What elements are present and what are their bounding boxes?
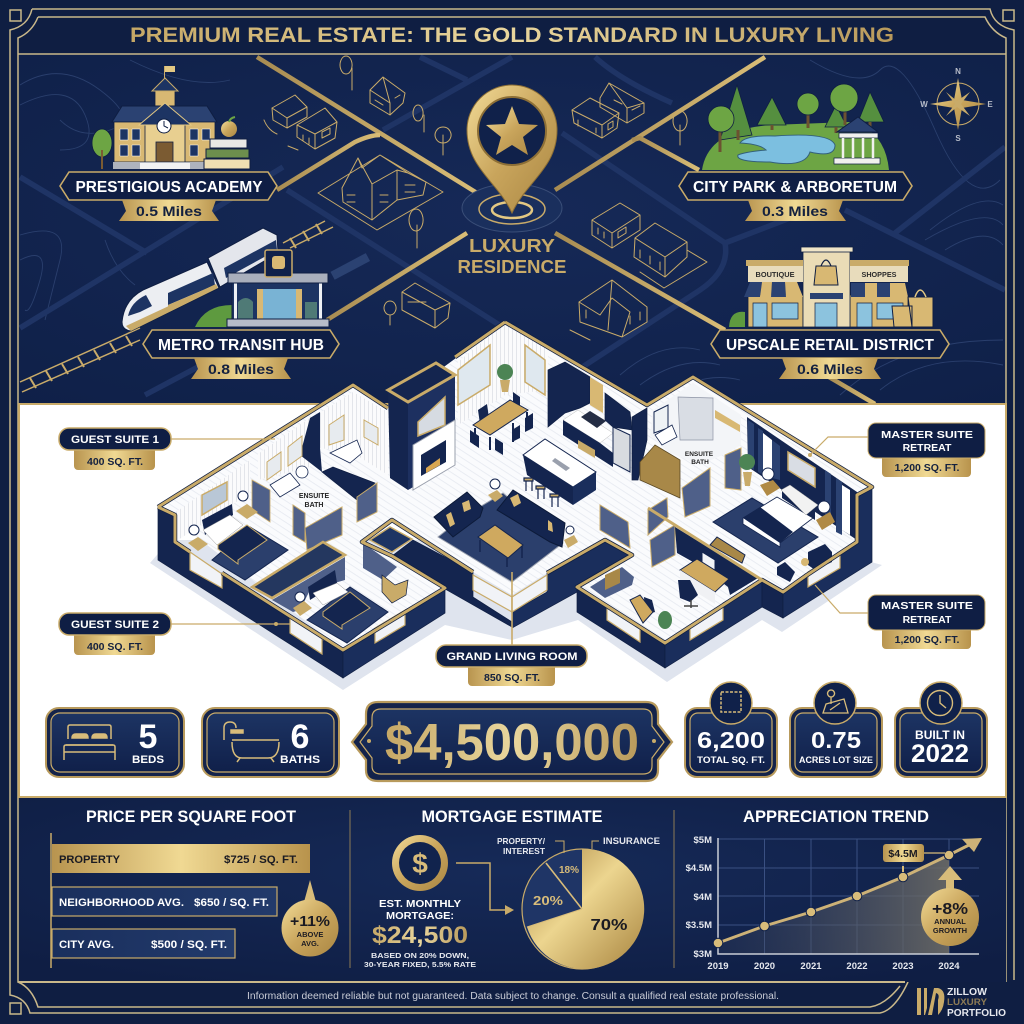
callout: guest suite 2 — [59, 613, 290, 655]
gold wall tops — [158, 322, 872, 650]
callout: master suite retreat upper: 1,200 SQ. FT. — [895, 462, 959, 474]
stat card: baths: BATHS — [280, 754, 320, 766]
label: prestigious academy: PRESTIGIOUS ACADEMY — [76, 179, 263, 196]
callout: master suite retreat upper: RETREAT — [903, 442, 952, 454]
callout: 4.5M — [883, 844, 945, 872]
stat card: baths — [202, 708, 339, 777]
arrow to pie — [456, 863, 514, 915]
grid — [718, 839, 979, 954]
pie chart: 20% — [533, 893, 563, 908]
chart: mortgage estimate: 30-YEAR FIXED, 5.5% RATE — [364, 960, 476, 969]
living room furniture — [434, 479, 578, 582]
fireplace wall — [388, 363, 455, 490]
bar: city average: $500 / SQ. FT. — [151, 939, 227, 951]
icon: compass rose: E — [987, 100, 993, 109]
icon: dollar coin — [392, 835, 448, 891]
chart: mortgage estimate — [364, 807, 660, 969]
chart: mortgage estimate: EST. MONTHLY — [379, 898, 461, 910]
pie chart: 18% — [559, 865, 579, 876]
icon: compass rose: N — [955, 67, 961, 76]
stat card: baths: 6 — [291, 718, 309, 756]
title: PREMIUM REAL ESTATE: THE GOLD STANDARD IN LUXURY LIVING — [130, 24, 894, 47]
icon: train — [122, 228, 278, 331]
callout: master suite retreat lower: RETREAT — [903, 614, 952, 626]
callout: guest suite 1 — [59, 428, 275, 470]
axis labels: $3.5M — [686, 920, 712, 931]
master suite — [713, 417, 857, 582]
chart: mortgage estimate: MORTGAGE: — [386, 910, 454, 922]
line-art neighbourhood houses — [264, 56, 707, 340]
stat card: lot size: 0.75 — [811, 727, 861, 753]
pie chart — [522, 849, 644, 969]
kitchen island — [523, 439, 596, 507]
stat card: year built: 2022 — [911, 740, 969, 768]
master ensuite: BATH — [691, 459, 709, 466]
callout: master suite retreat upper: MASTER SUITE — [881, 429, 973, 441]
pin: luxury residence — [462, 85, 562, 232]
kitchen — [548, 362, 647, 480]
guest suite 1 — [176, 392, 388, 580]
label: upscale retail: UPSCALE RETAIL DISTRICT — [726, 337, 934, 354]
pie labels: INSURANCE — [603, 836, 660, 846]
callout: guest suite 2: 400 SQ. FT. — [87, 641, 143, 653]
stat card: year built: BUILT IN — [915, 728, 965, 742]
pie labels: PROPERTY/ — [497, 836, 546, 846]
pie chart: 70% — [590, 917, 628, 934]
windows in exterior walls — [190, 552, 840, 654]
stat card: total sq ft: 6,200 — [697, 727, 765, 753]
icon: train tracks — [20, 221, 333, 392]
chart: mortgage estimate: MORTGAGE ESTIMATE — [422, 807, 602, 826]
logo: ZILLOW — [947, 987, 988, 998]
bar: property: PROPERTY — [59, 854, 121, 866]
pie labels: INTEREST — [503, 846, 546, 856]
logo — [917, 987, 1006, 1019]
pin label: RESIDENCE — [458, 257, 566, 277]
label: city park: CITY PARK & ARBORETUM — [693, 179, 897, 196]
floor plan — [150, 322, 882, 690]
axis labels: $3M — [694, 949, 712, 960]
guest suite 2 — [252, 527, 412, 643]
price plaque: $4,500,000 — [385, 714, 639, 772]
chart: appreciation trend — [686, 807, 982, 972]
callout: 4.5M: $4.5M — [888, 848, 918, 860]
stat card: year built — [895, 682, 987, 777]
stat card: total sq ft: TOTAL SQ. FT. — [697, 755, 765, 766]
icon: dollar coin: $ — [412, 848, 428, 879]
guest suite 1: ENSUITE — [299, 493, 329, 500]
bar: city average — [52, 929, 235, 958]
callout: annual growth: GROWTH — [933, 926, 967, 935]
price plaque — [352, 702, 672, 781]
panel: neighborhood map — [19, 54, 1006, 404]
pie labels — [497, 836, 660, 856]
icon: retail storefront — [729, 247, 933, 327]
icon: retail storefront: BOUTIQUE — [756, 272, 795, 279]
bar: neighborhood average: $650 / SQ. FT. — [194, 897, 269, 909]
icon: compass rose — [920, 67, 993, 143]
icon: academy building — [92, 66, 250, 169]
logo: PORTFOLIO — [947, 1008, 1006, 1019]
floor surface — [158, 322, 872, 650]
callout: annual growth — [921, 866, 979, 946]
panel: bottom analytics — [18, 797, 1006, 982]
callout: guest suite 2: GUEST SUITE 2 — [71, 619, 159, 631]
exterior walls — [158, 487, 872, 678]
guest suite 1: BATH — [305, 502, 323, 509]
stat card: lot size: ACRES LOT SIZE — [799, 755, 873, 766]
callout: annual growth: +8% — [932, 901, 968, 918]
icon: compass rose: S — [955, 134, 961, 143]
bar: property: $725 / SQ. FT. — [224, 854, 298, 866]
icon: transit station — [195, 250, 329, 327]
label: city park: 0.3 Miles — [762, 203, 828, 219]
icon: gold map pin — [467, 85, 557, 213]
chart: appreciation trend: 2019 — [707, 961, 729, 972]
stat card: beds: 5 — [139, 718, 157, 756]
logo: LUXURY — [947, 997, 988, 1008]
callout: above average: AVG. — [301, 939, 319, 948]
stat card: total sq ft — [685, 682, 777, 777]
trend line — [713, 838, 982, 948]
pin label: LUXURY — [469, 236, 555, 256]
master ensuite: ENSUITE — [685, 451, 714, 458]
label: metro transit hub: 0.8 Miles — [208, 361, 274, 377]
callout: grand living room — [436, 572, 587, 686]
bar: neighborhood average: NEIGHBORHOOD AVG. — [59, 897, 184, 909]
label: metro transit hub: METRO TRANSIT HUB — [158, 337, 324, 354]
callout: grand living room: GRAND LIVING ROOM — [446, 651, 578, 663]
chart: mortgage estimate: BASED ON 20% DOWN, — [371, 951, 469, 960]
callout: above average — [282, 880, 338, 956]
stat card: lot size — [790, 682, 882, 777]
label: city park — [679, 172, 912, 221]
chart: appreciation trend: 2022 — [846, 961, 868, 972]
label: prestigious academy — [60, 172, 277, 221]
axis labels: $4M — [694, 892, 712, 903]
callout: master suite retreat lower — [815, 585, 985, 649]
chart: price per square foot — [51, 807, 338, 968]
callout: annual growth: ANNUAL — [934, 917, 966, 926]
bar: neighborhood average — [52, 887, 277, 916]
callout: guest suite 1: GUEST SUITE 1 — [71, 434, 159, 446]
pin label — [458, 236, 566, 277]
chart: appreciation trend: APPRECIATION TREND — [743, 807, 929, 826]
chart: mortgage estimate: $24,500 — [372, 922, 468, 949]
icon: retail storefront: SHOPPES — [862, 272, 897, 279]
label: upscale retail — [711, 330, 949, 379]
panel: white floor plan background — [19, 404, 1006, 797]
footer disclaimer: Information deemed reliable but not guaranteed. Data subject to change. Consult a qualified real estate professional. — [247, 991, 779, 1002]
callout: grand living room: 850 SQ. FT. — [484, 672, 540, 684]
chart: appreciation trend: 2023 — [892, 961, 914, 972]
office — [590, 498, 758, 629]
callout: master suite retreat upper — [808, 423, 985, 477]
icon: bed — [64, 725, 115, 760]
chart: appreciation trend: 2024 — [938, 961, 960, 972]
label: prestigious academy: 0.5 Miles — [136, 203, 202, 219]
axis labels: $4.5M — [686, 863, 712, 874]
bar: property — [52, 844, 310, 873]
chart: price per square foot: PRICE PER SQUARE FOOT — [86, 807, 297, 826]
callout: above average: ABOVE — [297, 930, 323, 939]
label: upscale retail: 0.6 Miles — [797, 361, 863, 377]
chart: appreciation trend: 2021 — [800, 961, 822, 972]
callout: above average: +11% — [290, 913, 330, 930]
callout: guest suite 1: 400 SQ. FT. — [87, 456, 143, 468]
stat card: beds — [46, 708, 184, 777]
icon: city park — [702, 84, 889, 170]
bar: city average: CITY AVG. — [59, 939, 114, 951]
axis labels: $5M — [694, 835, 712, 846]
label: metro transit hub — [143, 330, 339, 379]
icon: bathtub — [224, 722, 279, 762]
axis labels — [686, 835, 712, 960]
callout: master suite retreat lower: MASTER SUITE — [881, 600, 973, 612]
master ensuite — [640, 383, 741, 517]
callout: master suite retreat lower: 1,200 SQ. FT. — [895, 634, 959, 646]
living and dining back wall — [458, 323, 548, 455]
stat card: beds: BEDS — [132, 754, 164, 766]
chart: appreciation trend: 2020 — [754, 961, 775, 972]
icon: compass rose: W — [920, 100, 928, 109]
